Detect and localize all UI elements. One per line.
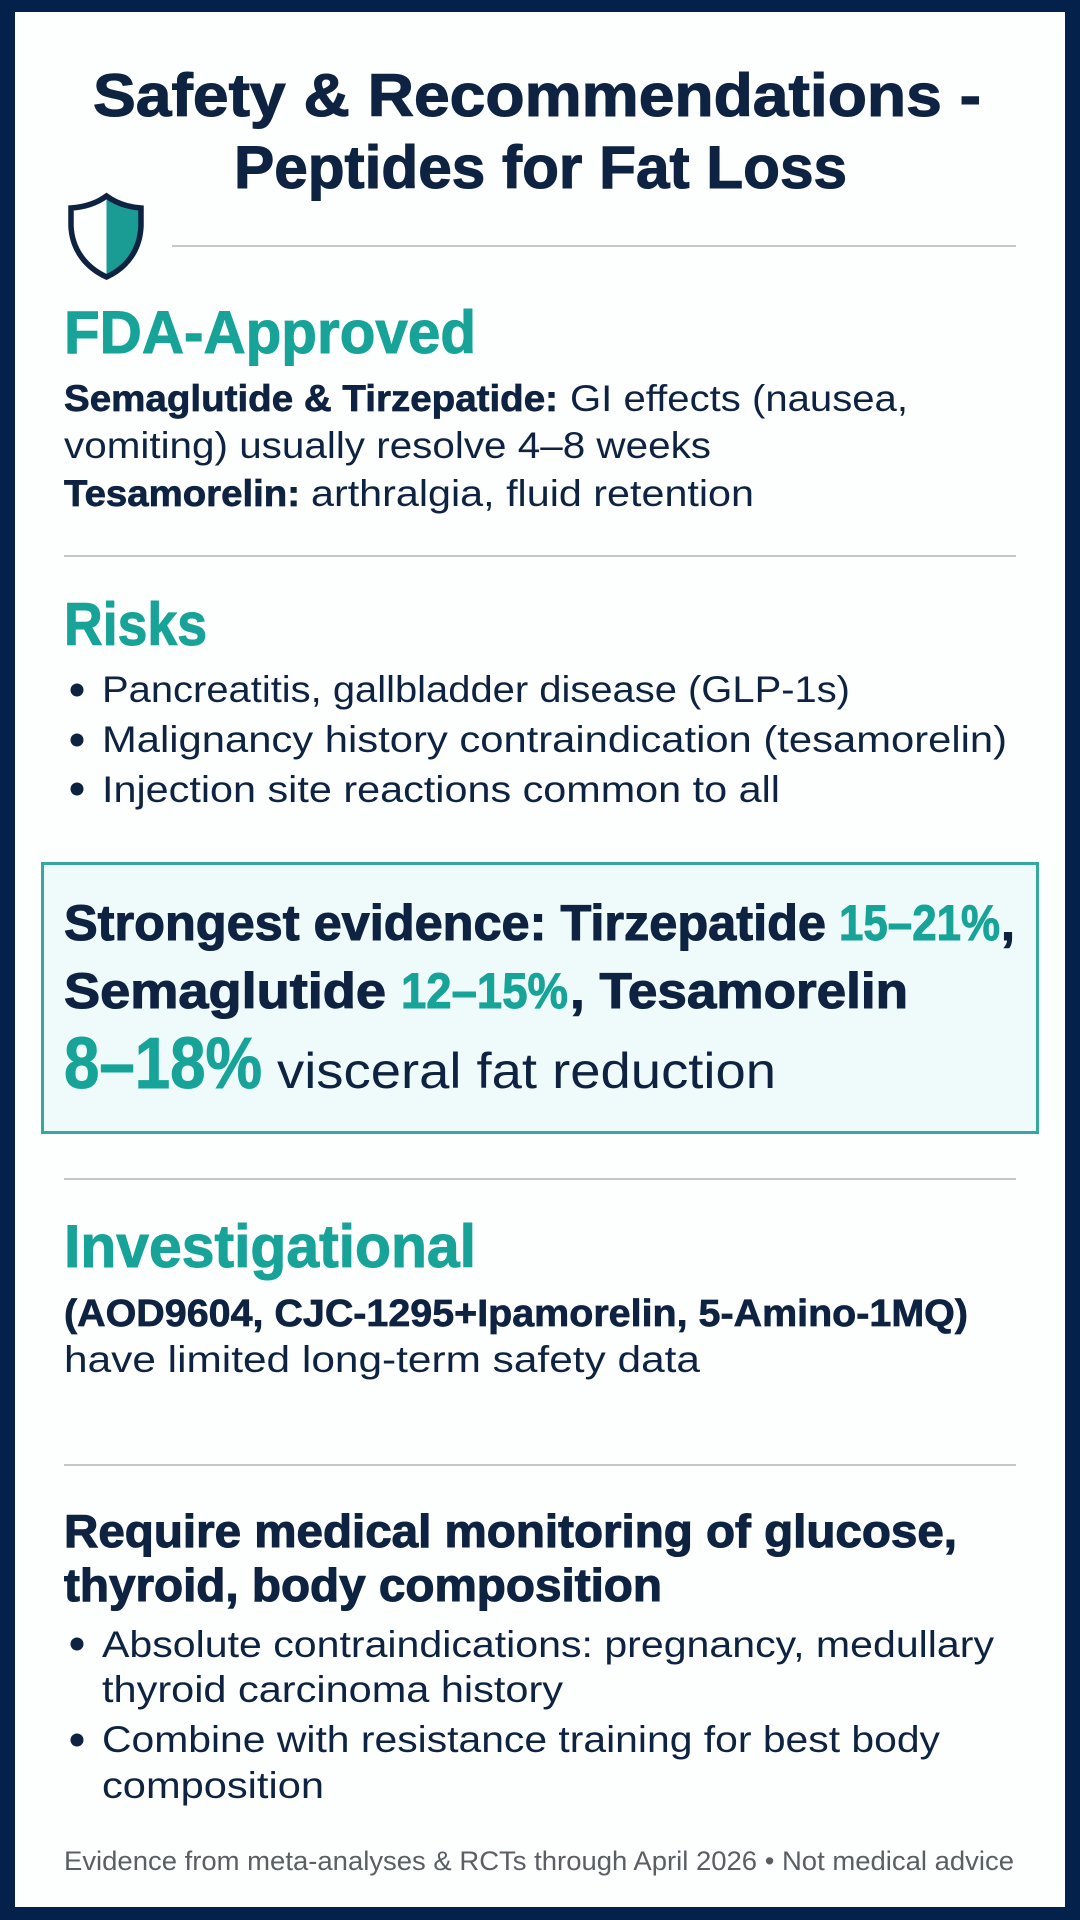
section: Investigational [64, 1213, 968, 1380]
text: FDA-approved side effects: arthralgia, fluid retention [311, 473, 754, 514]
text: FDA-approved side effects: GI effects (nausea, [570, 378, 908, 419]
risks list: Injection site reactions common to all [102, 769, 780, 810]
callout: strongest evidence: , [1001, 895, 1015, 951]
heading: FDA-Approved: FDA-Approved [64, 299, 476, 366]
callout: strongest evidence [42, 864, 1038, 1132]
title [93, 62, 981, 201]
text: FDA-approved side effects: Tesamorelin: [64, 473, 300, 514]
callout: strongest evidence: 12–15% [401, 963, 568, 1019]
callout: strongest evidence: 15–21% [839, 895, 1000, 951]
heading: medical monitoring: thyroid, body composition [64, 1559, 662, 1611]
callout: strongest evidence: visceral fat reduction [277, 1043, 776, 1099]
callout: strongest evidence: Strongest evidence: Tirzepatide [64, 895, 826, 951]
callout: strongest evidence: , Tesamorelin [570, 963, 908, 1019]
text: investigational peptides: (AOD9604, CJC-1295+Ipamorelin, 5-Amino-1MQ) [64, 1293, 968, 1335]
text: FDA-approved side effects: vomiting) usually resolve 4–8 weeks [64, 425, 711, 466]
text: FDA-approved side effects: Semaglutide & Tirzepatide: [64, 378, 558, 419]
text: investigational peptides [64, 1293, 968, 1380]
risks list: Pancreatitis, gallbladder disease (GLP-1s) [102, 669, 850, 710]
recommendations list: Combine with resistance training for best body [102, 1719, 941, 1760]
section: Risks [64, 591, 1007, 810]
text: investigational peptides: have limited long-term safety data [64, 1339, 700, 1380]
heading: Investigational: Investigational [64, 1213, 476, 1280]
risks list: Malignancy history contraindication (tesamorelin) [102, 719, 1007, 760]
callout: strongest evidence: 8–18% [64, 1024, 262, 1104]
heading: Risks: Risks [64, 591, 207, 658]
section: medical monitoring [64, 1505, 995, 1806]
title: Peptides for Fat Loss [234, 134, 847, 201]
callout: strongest evidence: Semaglutide [64, 963, 386, 1019]
heading: medical monitoring: Require medical monitoring of glucose, [64, 1505, 957, 1557]
icon: shield [71, 196, 141, 277]
title: Safety & Recommendations - [93, 62, 981, 129]
recommendations list: thyroid carcinoma history [102, 1669, 564, 1710]
heading: medical monitoring [64, 1505, 957, 1611]
recommendations list: Absolute contraindications: pregnancy, medullary [102, 1624, 995, 1665]
recommendations list [70, 1624, 995, 1806]
footer note: Evidence from meta-analyses & RCTs through April 2026 • Not medical advice [64, 1846, 1014, 1876]
section: FDA-Approved [64, 299, 908, 514]
risks list [70, 669, 1007, 810]
recommendations list: composition [102, 1765, 324, 1806]
text: FDA-approved side effects [64, 378, 908, 514]
